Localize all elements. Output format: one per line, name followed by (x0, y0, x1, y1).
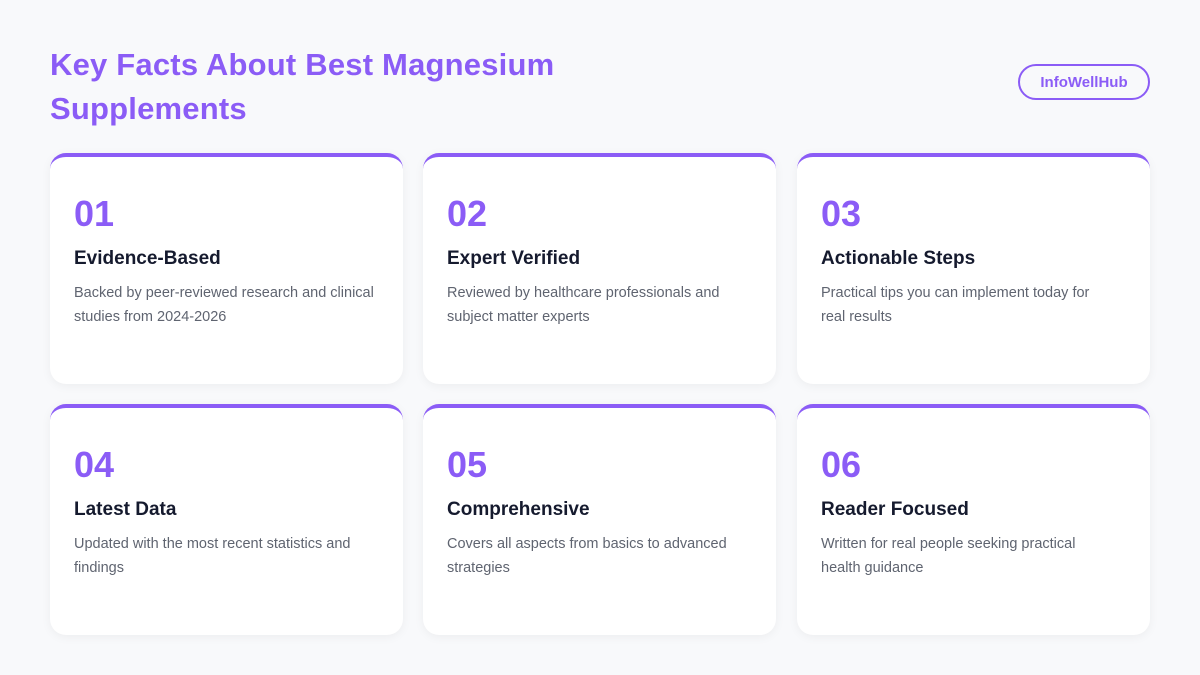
card 04: 04 (74, 444, 114, 485)
card 04 (50, 404, 403, 635)
card 03: Practical tips you can implement today for real results (821, 285, 1089, 325)
card 03 (797, 153, 1150, 384)
card 05: Comprehensive (447, 499, 590, 520)
card 03: 03 (821, 193, 861, 234)
card 03: Actionable Steps (821, 248, 975, 269)
card 06 (797, 404, 1150, 635)
card 01: Evidence-Based (74, 248, 221, 269)
card 02 (423, 153, 776, 384)
card 06: 06 (821, 444, 861, 485)
badge: brand: InfoWellHub (1040, 74, 1128, 91)
card 05 (423, 404, 776, 635)
card 06: Reader Focused (821, 499, 969, 520)
card 01: Backed by peer-reviewed research and clinical studies from 2024-2026 (74, 285, 374, 325)
card 02: Reviewed by healthcare professionals and subject matter experts (447, 285, 719, 325)
card 02: Expert Verified (447, 248, 580, 269)
badge: brand (1018, 64, 1150, 100)
card 06: Written for real people seeking practical health guidance (821, 536, 1075, 576)
card 04: Updated with the most recent statistics and findings (74, 536, 350, 576)
card 01 (50, 153, 403, 384)
card 05: 05 (447, 444, 487, 485)
card 05: Covers all aspects from basics to advanced strategies (447, 536, 727, 576)
card 04: Latest Data (74, 499, 176, 520)
card 01: 01 (74, 193, 114, 234)
title: Key Facts About Best Magnesium Supplements (50, 47, 554, 126)
card 02: 02 (447, 193, 487, 234)
